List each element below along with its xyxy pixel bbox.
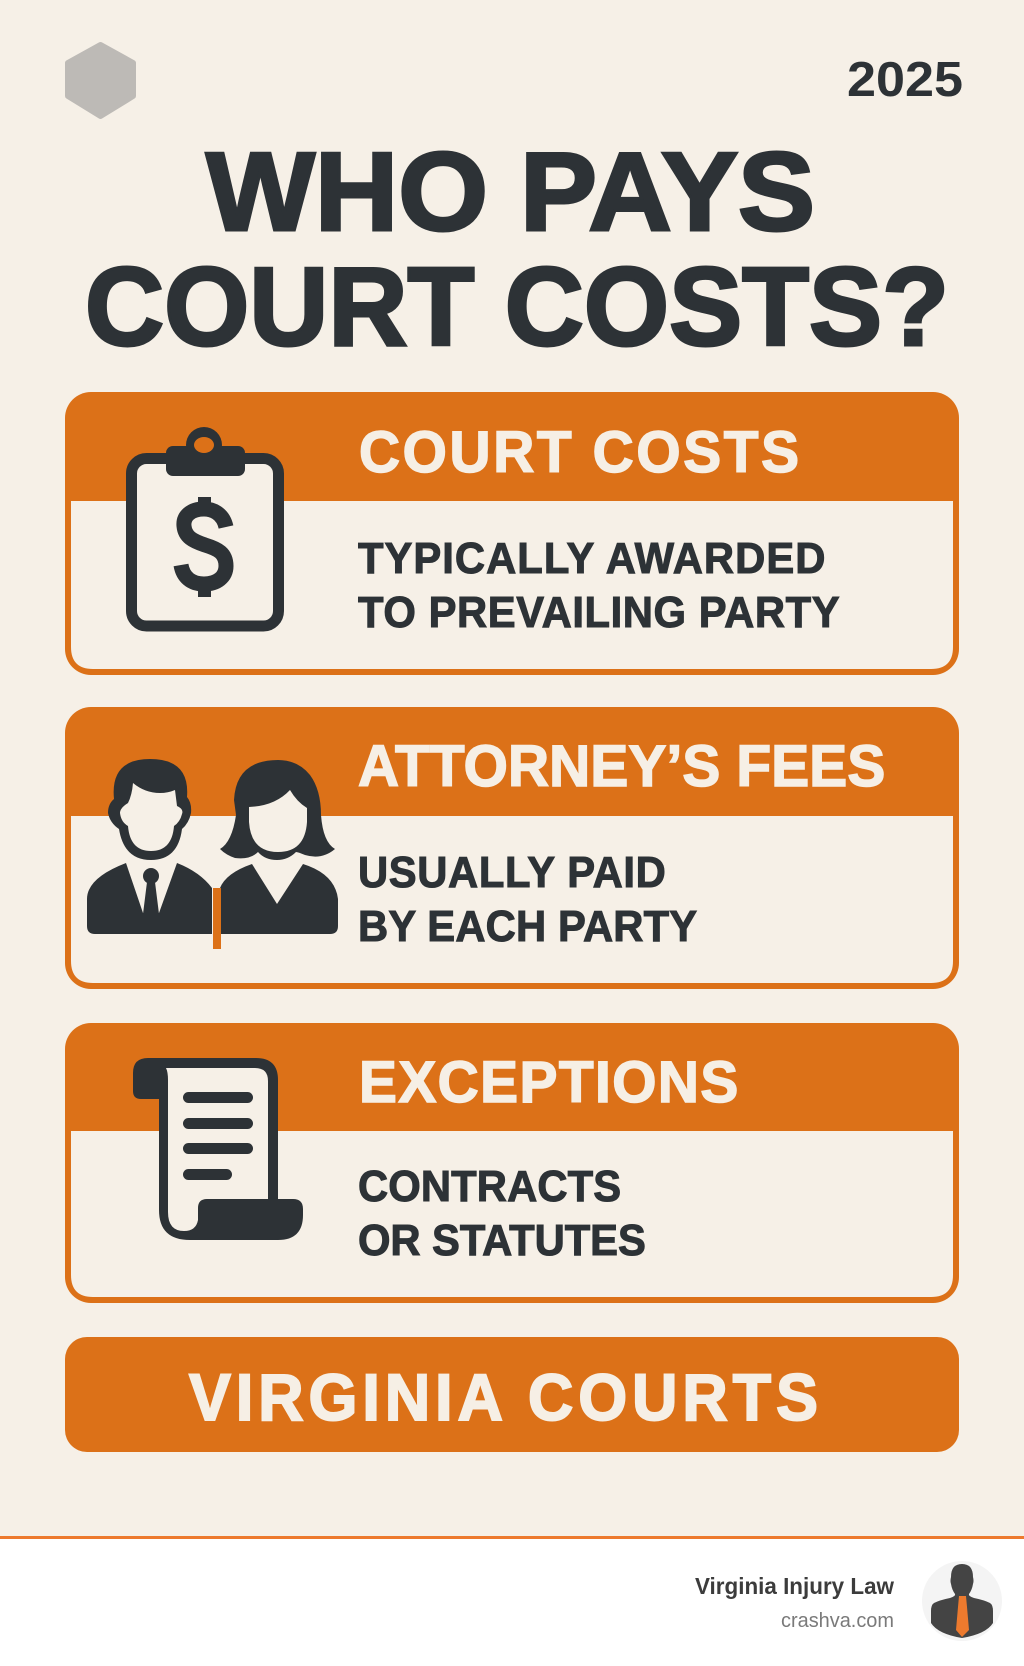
text: court costs description: TYPICALLY AWARDED xyxy=(358,534,825,583)
panel: attorney's fees xyxy=(65,707,959,989)
orange divider xyxy=(213,888,221,949)
woman hair xyxy=(220,760,335,860)
woman body xyxy=(220,864,338,934)
heading: court costs: COURT COSTS xyxy=(359,420,799,485)
panel: court costs xyxy=(65,392,959,675)
title: COURT COSTS? xyxy=(85,245,949,369)
heading: attorney's fees: ATTORNEY’S FEES xyxy=(358,734,885,799)
text: attorney's fees description: BY EACH PARTY xyxy=(358,902,697,951)
text: court costs description: TO PREVAILING PARTY xyxy=(358,588,840,637)
icon: man and woman attorneys xyxy=(87,759,338,949)
panel: exceptions xyxy=(65,1023,959,1303)
text: attorney's fees description xyxy=(358,848,697,951)
icon: scroll document xyxy=(133,1058,303,1240)
text: exceptions description: OR STATUTES xyxy=(358,1216,646,1265)
footer website: crashva.com xyxy=(781,1610,894,1632)
man head xyxy=(108,759,191,860)
title xyxy=(85,130,949,369)
icon: grey hexagon placeholder xyxy=(68,45,133,116)
text: exceptions description: CONTRACTS xyxy=(358,1162,621,1211)
heading: exceptions: EXCEPTIONS xyxy=(359,1050,738,1115)
text: court costs description xyxy=(358,534,840,637)
year label: 2025 xyxy=(847,53,963,107)
icon: clipboard with dollar sign xyxy=(132,427,278,626)
banner: Virginia courts xyxy=(65,1337,959,1452)
footer brand name: Virginia Injury Law xyxy=(695,1573,894,1599)
text: attorney's fees description: USUALLY PAID xyxy=(358,848,666,897)
icon: attorney silhouette logo xyxy=(922,1561,1002,1641)
footer xyxy=(0,1536,1024,1666)
man body xyxy=(87,863,212,934)
title: WHO PAYS xyxy=(206,130,815,254)
text: exceptions description xyxy=(358,1162,646,1265)
banner: Virginia courts: VIRGINIA COURTS xyxy=(189,1361,818,1434)
